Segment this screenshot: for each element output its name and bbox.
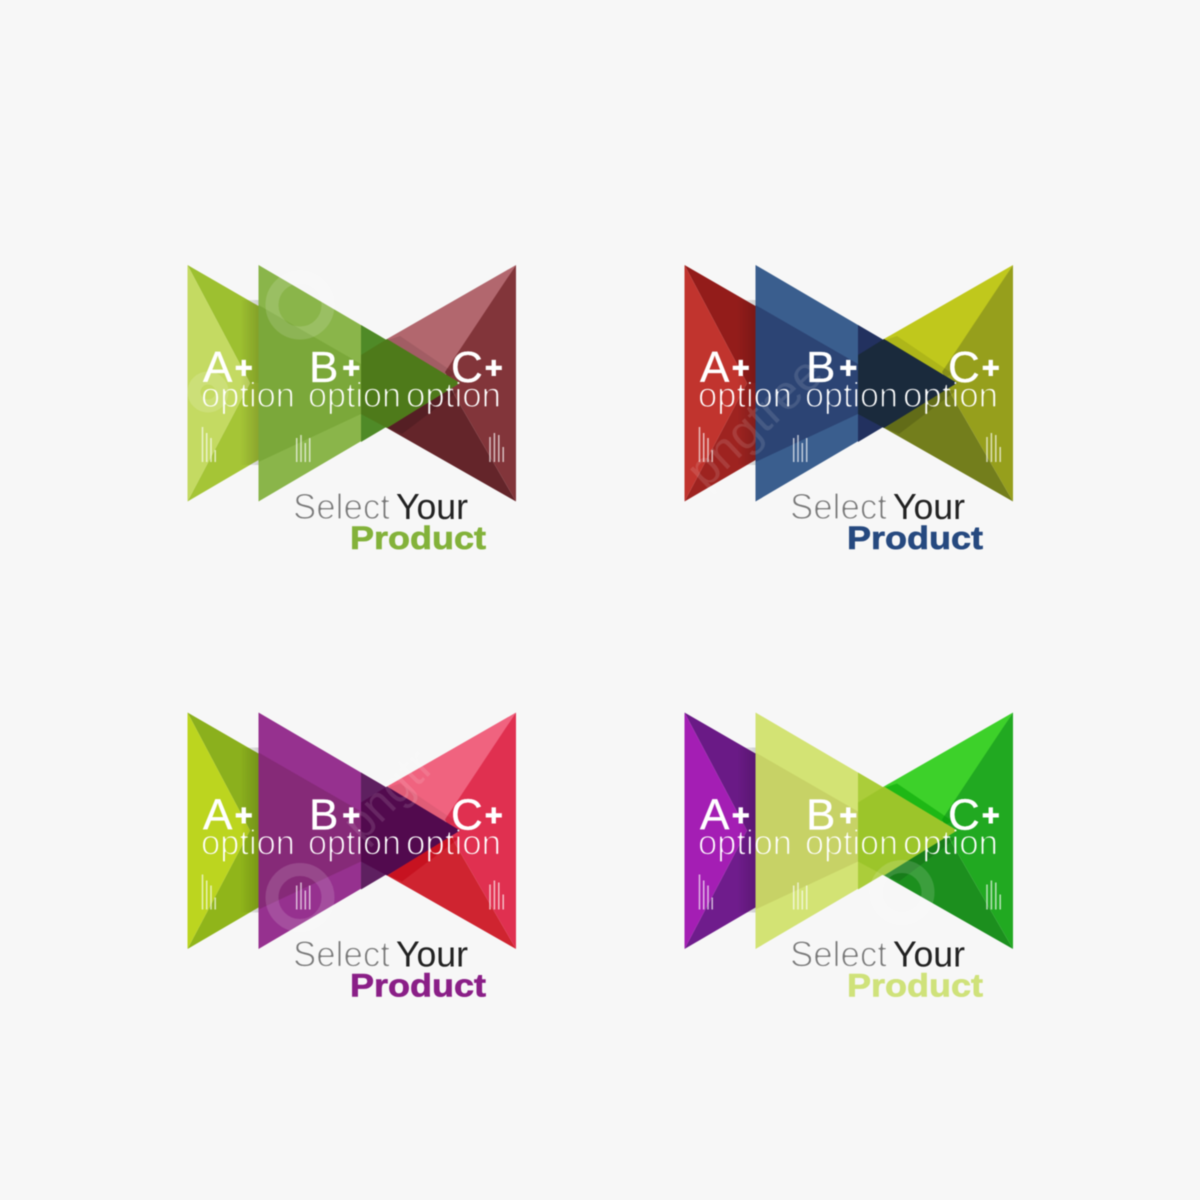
triangle A: options column A <box>684 712 756 949</box>
watermark <box>272 739 444 926</box>
option label C: option <box>903 376 998 415</box>
A+ label: A <box>700 343 729 392</box>
triangle B: options column B <box>258 265 460 502</box>
mini bars A <box>202 427 215 462</box>
Product heading: Product <box>847 520 983 556</box>
watermark: pngtr <box>332 739 444 850</box>
Select heading: Select <box>790 934 887 974</box>
option label C: option <box>406 824 501 862</box>
C+ label: + <box>485 800 503 832</box>
option label A: option <box>201 376 295 415</box>
mini bars B <box>794 435 807 462</box>
A+ label: + <box>235 352 253 385</box>
triangle B: options column B <box>258 712 460 949</box>
B+ label: B <box>806 343 835 392</box>
option label B: option <box>805 824 898 862</box>
A+ label: A <box>203 790 232 840</box>
option label A: option <box>698 376 792 415</box>
Product heading: Product <box>350 520 486 556</box>
triangle A: options column A <box>684 265 756 502</box>
A+ label: + <box>732 800 750 832</box>
C+ label: C <box>948 343 980 392</box>
triangle A: options column A <box>188 265 258 502</box>
Your heading: Your <box>396 934 468 974</box>
option label B: option <box>308 824 401 862</box>
B+ label: B <box>309 790 338 840</box>
A+ label: + <box>235 800 253 832</box>
Select heading: Select <box>790 486 887 527</box>
mini bars C <box>490 880 503 910</box>
panel: lime, purple and pink bow-tie option selector <box>188 712 516 1004</box>
C+ label: + <box>485 352 503 385</box>
mini bars C <box>987 880 1000 910</box>
A+ label: A <box>700 790 729 840</box>
triangle B: options column B <box>756 712 957 949</box>
B+ label: + <box>342 800 360 832</box>
mini bars A <box>202 874 215 910</box>
mini bars C <box>987 433 1000 462</box>
C+ label: C <box>451 790 483 840</box>
B+ label: B <box>309 343 338 392</box>
triangle A: options column A <box>188 712 258 949</box>
mini bars B <box>297 882 310 910</box>
panel: violet, pale lime and green bow-tie option selector <box>684 712 1013 1004</box>
Your heading: Your <box>893 934 965 974</box>
B+ label: + <box>840 800 857 832</box>
mini bars C <box>490 433 503 462</box>
mini bars B <box>297 435 310 462</box>
triangle C: options column C <box>877 712 1013 949</box>
Select heading: Select <box>293 486 390 527</box>
triangle B: options column B <box>756 265 957 502</box>
watermark <box>876 866 928 918</box>
Select heading: Select <box>293 934 390 974</box>
option label A: option <box>201 824 295 862</box>
mini bars A <box>700 427 712 462</box>
B+ label: + <box>342 352 360 385</box>
option label C: option <box>903 824 998 862</box>
option label B: option <box>805 376 898 415</box>
watermark <box>194 277 328 406</box>
watermark: pngtree <box>676 347 833 498</box>
Product heading: Product <box>847 968 983 1004</box>
triangle C: options column C <box>877 265 1013 502</box>
option label B: option <box>308 376 401 415</box>
triangle C: options column C <box>380 712 516 949</box>
Your heading: Your <box>396 486 468 527</box>
A+ label: A <box>203 343 232 392</box>
triangle C: options column C <box>380 265 516 502</box>
Product heading: Product <box>350 968 486 1004</box>
option label C: option <box>406 376 501 415</box>
C+ label: + <box>982 800 1000 832</box>
B+ label: + <box>840 352 857 385</box>
C+ label: C <box>948 790 980 840</box>
mini bars B <box>794 882 807 910</box>
panel: red, blue and olive bow-tie option selector <box>676 265 1013 556</box>
B+ label: B <box>806 790 835 840</box>
option label A: option <box>698 824 792 862</box>
mini bars A <box>700 874 712 910</box>
A+ label: + <box>732 352 750 385</box>
panel: green and maroon bow-tie option selector <box>188 265 516 556</box>
C+ label: + <box>982 352 1000 385</box>
C+ label: C <box>451 343 483 392</box>
Your heading: Your <box>893 486 965 527</box>
